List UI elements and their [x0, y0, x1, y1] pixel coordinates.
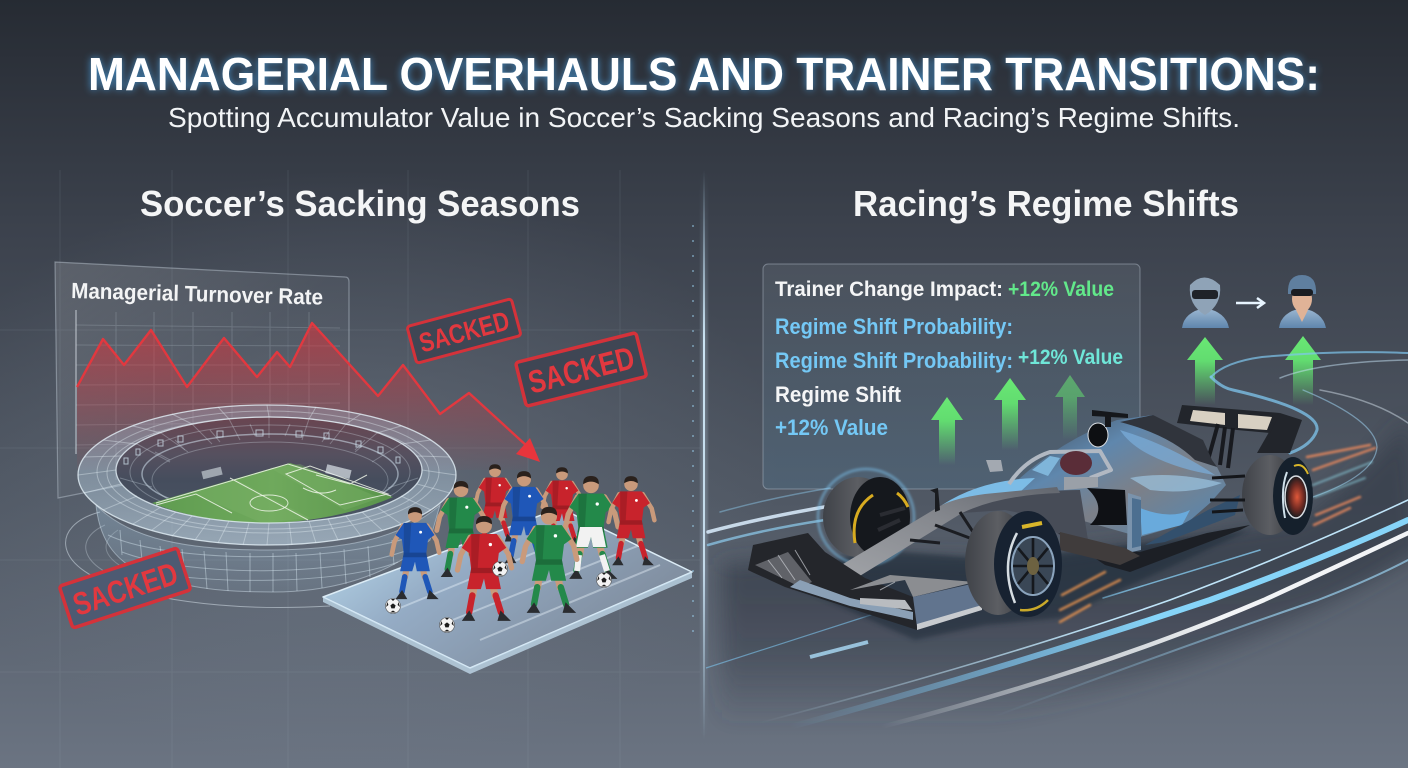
stat line: trainer change impact: [775, 278, 1114, 301]
player: red back right: [542, 467, 582, 544]
stat line: trainer change impact: +12% Value: [1008, 278, 1114, 301]
light blue engine deck: [942, 478, 1035, 510]
pitch: [152, 463, 393, 523]
stat line: trainer change impact: Trainer Change Impact:: [775, 278, 1003, 301]
center divider: [693, 170, 707, 740]
green arrow 1: [931, 397, 963, 465]
car body: [813, 410, 1250, 591]
green arrow 3: [1055, 375, 1085, 440]
floor: [1058, 525, 1250, 572]
rear wheel: [1242, 455, 1313, 535]
title: MANAGERIAL OVERHAULS AND TRAINER TRANSITIONS:: [88, 48, 1320, 100]
stat line: regime shift probability value: Regime Shift Probability:: [775, 348, 1013, 373]
player: red back: [476, 464, 515, 541]
thick blue streak: [790, 520, 1408, 727]
stamp: sacked middle: SACKED: [524, 339, 638, 400]
player: red front: [458, 516, 512, 620]
sidepod intake: [1087, 488, 1127, 525]
soccer players: [386, 464, 654, 632]
player: red right: [608, 476, 654, 564]
player: green white shorts: [565, 476, 618, 578]
player: green left: [437, 481, 486, 576]
engine cover: [1010, 415, 1226, 537]
stamp: sacked bottom: SACKED: [68, 555, 182, 623]
player: blue front: [392, 507, 439, 598]
player: blue back: [501, 471, 548, 562]
heading: racing: Racing’s Regime Shifts: [853, 183, 1239, 224]
red line chart: [77, 323, 540, 470]
stat line: regime shift: Regime Shift: [775, 382, 902, 407]
white streak: [881, 533, 1408, 727]
green arrow 2: [994, 378, 1026, 450]
far front wheel: [818, 469, 914, 565]
heading: soccer: Soccer’s Sacking Seasons: [140, 183, 580, 224]
nose: [813, 487, 1060, 591]
halo and cockpit: [1009, 451, 1111, 490]
stamp: sacked top: SACKED: [416, 306, 513, 358]
stat line: regime shift probability: Regime Shift Probability:: [775, 314, 1013, 339]
rear suspension: [1210, 476, 1245, 512]
stadium: [66, 405, 456, 607]
dark side panel: [962, 490, 1088, 540]
stat line: regime shift probability value: +12% Value: [1018, 346, 1123, 369]
front suspension: [910, 512, 975, 543]
dim streak: [993, 560, 1408, 717]
panel: trainer stats: [763, 264, 1140, 489]
thin blue streak: [759, 500, 1408, 723]
mirror: [986, 460, 1003, 472]
icon: outgoing trainer: [1182, 278, 1229, 328]
player: green front: [522, 507, 577, 612]
racing car: [748, 405, 1375, 640]
icon: incoming trainer: [1279, 275, 1326, 328]
panel: managerial turnover chart: [55, 262, 540, 498]
title: MANAGERIAL OVERHAULS AND TRAINER TRANSITIONS:: [88, 48, 1320, 100]
arrow: trainer change: [1236, 298, 1264, 308]
balls: [386, 562, 612, 632]
road dash: [810, 642, 868, 657]
airbox: [1088, 410, 1128, 447]
rear wing: [1177, 405, 1302, 468]
stat line: regime shift probability value: [775, 346, 1123, 373]
stadium rim: [78, 405, 456, 545]
front wing: [748, 533, 982, 630]
speed streaks: [708, 352, 1408, 727]
green arrow 4: [1187, 337, 1223, 405]
stat line: value: +12% Value: [775, 415, 888, 440]
chart title: Managerial Turnover Rate: [71, 278, 323, 310]
green arrow 5: [1285, 336, 1321, 405]
front wheel: [965, 511, 1062, 617]
road: [706, 420, 1408, 725]
orange streaks: [1060, 445, 1375, 622]
subtitle: Spotting Accumulator Value in Soccer’s Sacking Seasons and Racing’s Regime Shifts.: [168, 102, 1240, 133]
car shadow: [770, 530, 1250, 640]
glass platform: [323, 508, 692, 674]
